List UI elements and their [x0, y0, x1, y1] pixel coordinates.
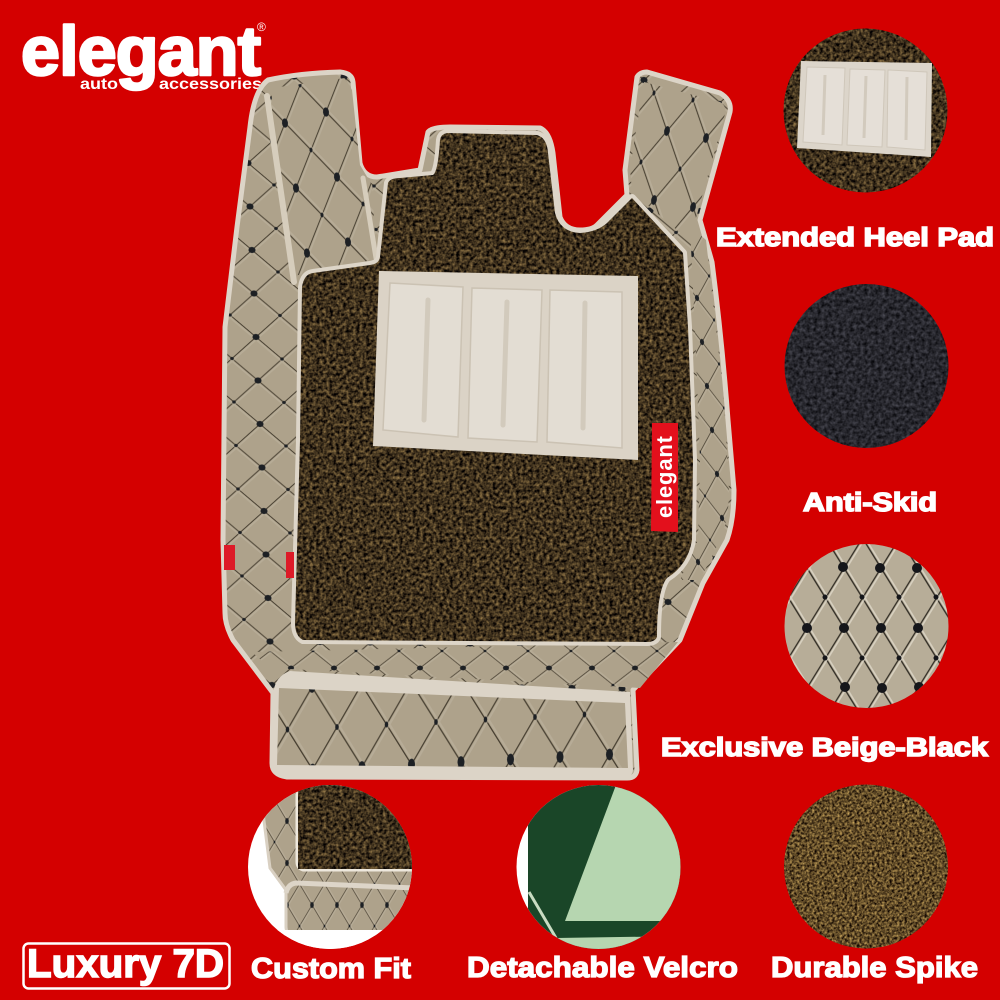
right quilt block: [630, 82, 725, 236]
red elegant tag: elegant: [652, 435, 677, 518]
velcro lower light band: [558, 936, 642, 949]
heel pad panel 1: [383, 283, 463, 437]
circle: detachable velcro: [516, 785, 690, 950]
custom fit quilt base: [263, 787, 420, 935]
heel pad panel 2: [468, 288, 542, 442]
quilt studs: [802, 562, 938, 693]
seam strips upper left: [267, 96, 376, 282]
coir mat border: [295, 133, 693, 642]
heel pad grooves: [424, 300, 585, 428]
label: detachable velcro: Detachable Velcro: [467, 952, 738, 984]
small red side tags: [224, 545, 294, 578]
label: anti-skid: Anti-Skid: [803, 489, 937, 517]
circle: anti-skid: [784, 283, 949, 449]
label: durable spike: Durable Spike: [771, 952, 978, 984]
logo: elegant auto accessories: elegant: [21, 12, 261, 90]
circle: exclusive beige-black quilt: [784, 543, 949, 709]
badge: Luxury 7D: Luxury 7D: [27, 942, 224, 986]
upper left quilt block: [272, 78, 376, 276]
logo: elegant auto accessories: accessories: [159, 76, 262, 93]
right side strip: [680, 226, 729, 580]
velcro edge trim: [529, 892, 556, 938]
label: custom fit: Custom Fit: [251, 953, 411, 985]
label: exclusive beige-black: Exclusive Beige-Black: [661, 734, 989, 762]
velcro light panel: [565, 785, 690, 921]
footrest panel: [273, 671, 633, 777]
logo: elegant auto accessories: auto: [80, 76, 118, 93]
circle: durable spike: [784, 784, 949, 949]
logo: elegant auto accessories: ®: [257, 20, 266, 34]
outer quilted base: left strip: [223, 72, 734, 778]
floor mat product: [223, 72, 734, 778]
custom fit footrest trim: [286, 883, 415, 893]
custom fit coir: [297, 785, 415, 870]
heel pad: [373, 271, 638, 460]
heel pad panel 3: [547, 290, 622, 448]
label: extended heel pad: Extended Heel Pad: [716, 224, 994, 252]
red elegant tag: [651, 423, 678, 532]
circle: extended heel pad: [783, 28, 948, 193]
circle: custom fit: [248, 785, 420, 950]
footrest quilt: [277, 688, 628, 768]
rear quilt strip: [252, 642, 678, 688]
coir mat texture: [285, 125, 705, 650]
